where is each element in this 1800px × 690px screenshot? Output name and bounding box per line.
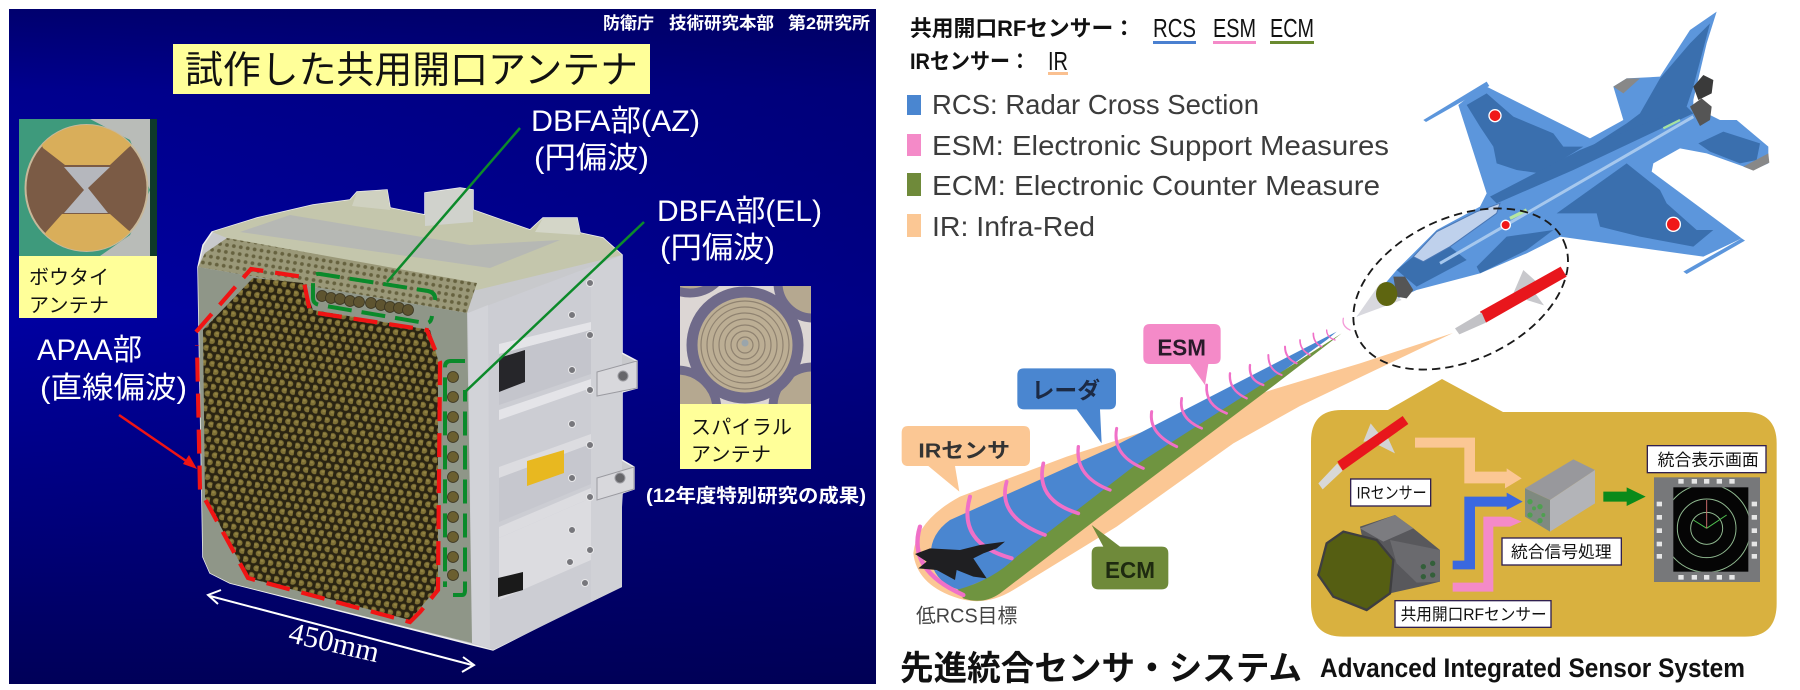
header: organisation: 防衛庁 [603, 13, 654, 33]
black nameplate [499, 350, 525, 392]
DBFA EL elements [448, 372, 458, 580]
label: DBFA EL: (円偏波) [660, 232, 775, 265]
side face with shelves [468, 255, 622, 650]
callout: IR sensor [902, 426, 1030, 492]
antenna unit [198, 188, 637, 650]
header: organisation: 第2研究所 [788, 13, 870, 33]
callout: ECM: ECM [1105, 557, 1155, 583]
label: integrated signal processing [1502, 538, 1621, 565]
mounting brackets [597, 361, 637, 500]
label: APAA: APAA部 [37, 334, 142, 367]
note: FY12 research: (12年度特別研究の成果) [646, 484, 866, 507]
callout: ECM [1092, 525, 1168, 589]
IR missile [1455, 267, 1567, 334]
low-RCS target silhouette [915, 542, 1005, 580]
fuselage highlight [1440, 117, 1693, 263]
header: organisation [603, 13, 870, 33]
RF signal arrow [1453, 493, 1523, 569]
callout: ESM [1143, 324, 1221, 385]
sensor beams and callouts [902, 318, 1453, 628]
dimension arrow [208, 590, 474, 672]
antenna element strip [198, 238, 477, 313]
label: integrated display screen: 統合表示画面 [1658, 451, 1759, 470]
sensor key: ECM [1270, 13, 1314, 43]
DBFA AZ elements [316, 290, 414, 316]
sensor key: ESM [1213, 13, 1256, 43]
label: APAA: (直線偏波) [40, 372, 187, 405]
signal processor unit [1525, 459, 1595, 532]
sensor key: IRセンサー： [910, 49, 1030, 74]
bowtie antenna label: ボウタイ [29, 266, 109, 289]
spiral antenna label [680, 404, 811, 469]
ECM beam [957, 333, 1342, 601]
spiral antenna photo [680, 286, 811, 404]
dashed focus ellipse [1328, 176, 1594, 402]
bolts [566, 280, 594, 586]
hinomaru markings [1489, 110, 1680, 231]
wing rails [1423, 82, 1489, 122]
bowtie antenna label [19, 256, 157, 318]
green dashed outline: DBFA EL [445, 361, 465, 595]
legend: IR: Infra-Red [932, 211, 1095, 242]
IR signal arrow [1415, 438, 1522, 488]
label: integrated signal processing: 統合信号処理 [1511, 543, 1612, 562]
panel: advanced integrated sensor system [900, 12, 1777, 688]
camouflage patches [1397, 23, 1760, 287]
IR beam [913, 333, 1453, 601]
sensor key: RCS [1153, 13, 1196, 43]
label: DBFA AZ: (円偏波) [534, 142, 649, 175]
title box: 試作した共用開口アンテナ [185, 50, 638, 92]
label: DBFA AZ [531, 105, 700, 175]
radome [1376, 282, 1397, 306]
bowtie antenna photo [19, 119, 157, 256]
antenna array grid [203, 278, 438, 620]
sensor key: IR [1048, 46, 1068, 76]
callout: IR sensor: IRセンサ [918, 439, 1010, 462]
ESM arcs [917, 318, 1350, 595]
panel: prototype shared-aperture antenna [9, 9, 876, 684]
sensor key [910, 13, 1314, 76]
legend: ECM: Electronic Counter Measure [932, 170, 1380, 201]
gold panel [1311, 379, 1777, 637]
label: shared aperture RF sensor [1395, 601, 1551, 627]
label: shared aperture RF sensor: 共用開口RFセンサー [1401, 605, 1547, 624]
aircraft [1357, 12, 1769, 317]
legend: ESM: Electronic Support Measures [932, 130, 1389, 161]
legend [907, 89, 1389, 242]
bottom title: Advanced Integrated Sensor System [1320, 653, 1745, 683]
label: integrated display screen [1647, 446, 1766, 473]
label: low RCS target: 低RCS目標 [916, 605, 1017, 628]
red arrow: APAA [119, 415, 197, 469]
spiral antenna label: スパイラル [691, 417, 792, 439]
display unit [1654, 477, 1760, 582]
leader line: DBFA AZ [387, 128, 520, 282]
bottom title: 先進統合センサ・システム [900, 650, 1302, 688]
top face [212, 190, 622, 290]
seeker housing [1393, 277, 1413, 298]
grey tail tips [1613, 78, 1640, 93]
header: organisation: 技術研究本部 [669, 14, 774, 33]
bowtie antenna label: アンテナ [29, 295, 109, 317]
front face [198, 267, 472, 643]
yellow warning label [527, 450, 564, 486]
label: IR sensor: IRセンサー [1357, 484, 1427, 503]
spiral antenna label: アンテナ [691, 444, 771, 466]
bottom title [900, 650, 1745, 688]
small missile [1318, 416, 1408, 489]
ESM signal arrow [1453, 517, 1522, 592]
callout: radar [1017, 368, 1116, 443]
connector panel [498, 572, 523, 597]
fighter aircraft and missile [1328, 12, 1769, 402]
leader line: DBFA EL [465, 222, 644, 392]
shared aperture sensor model [1318, 515, 1440, 610]
callout: ESM: ESM [1157, 334, 1206, 360]
integrated processing inset [1311, 379, 1777, 637]
label: DBFA EL: DBFA部(EL) [657, 195, 822, 228]
canopy [1413, 203, 1500, 262]
engines [1693, 75, 1713, 100]
output arrow [1603, 487, 1646, 506]
green dashed outline: DBFA AZ [313, 274, 435, 323]
green accents [1510, 210, 1527, 218]
label: DBFA AZ: DBFA部(AZ) [531, 105, 700, 138]
antenna body silhouette [198, 188, 637, 650]
callout: radar: レーダ [1032, 377, 1100, 403]
RF beam [931, 332, 1337, 590]
label: APAA [37, 334, 187, 405]
label: IR sensor [1351, 479, 1431, 506]
airframe silhouette [1357, 12, 1768, 317]
legend: RCS: Radar Cross Section [932, 89, 1259, 120]
red dashed outline: APAA [196, 269, 440, 622]
dimension label: 450mm [286, 616, 382, 669]
sensor key: 共用開口RFセンサー： [910, 16, 1135, 41]
nose cone [1357, 283, 1402, 317]
label: DBFA EL [657, 195, 822, 265]
